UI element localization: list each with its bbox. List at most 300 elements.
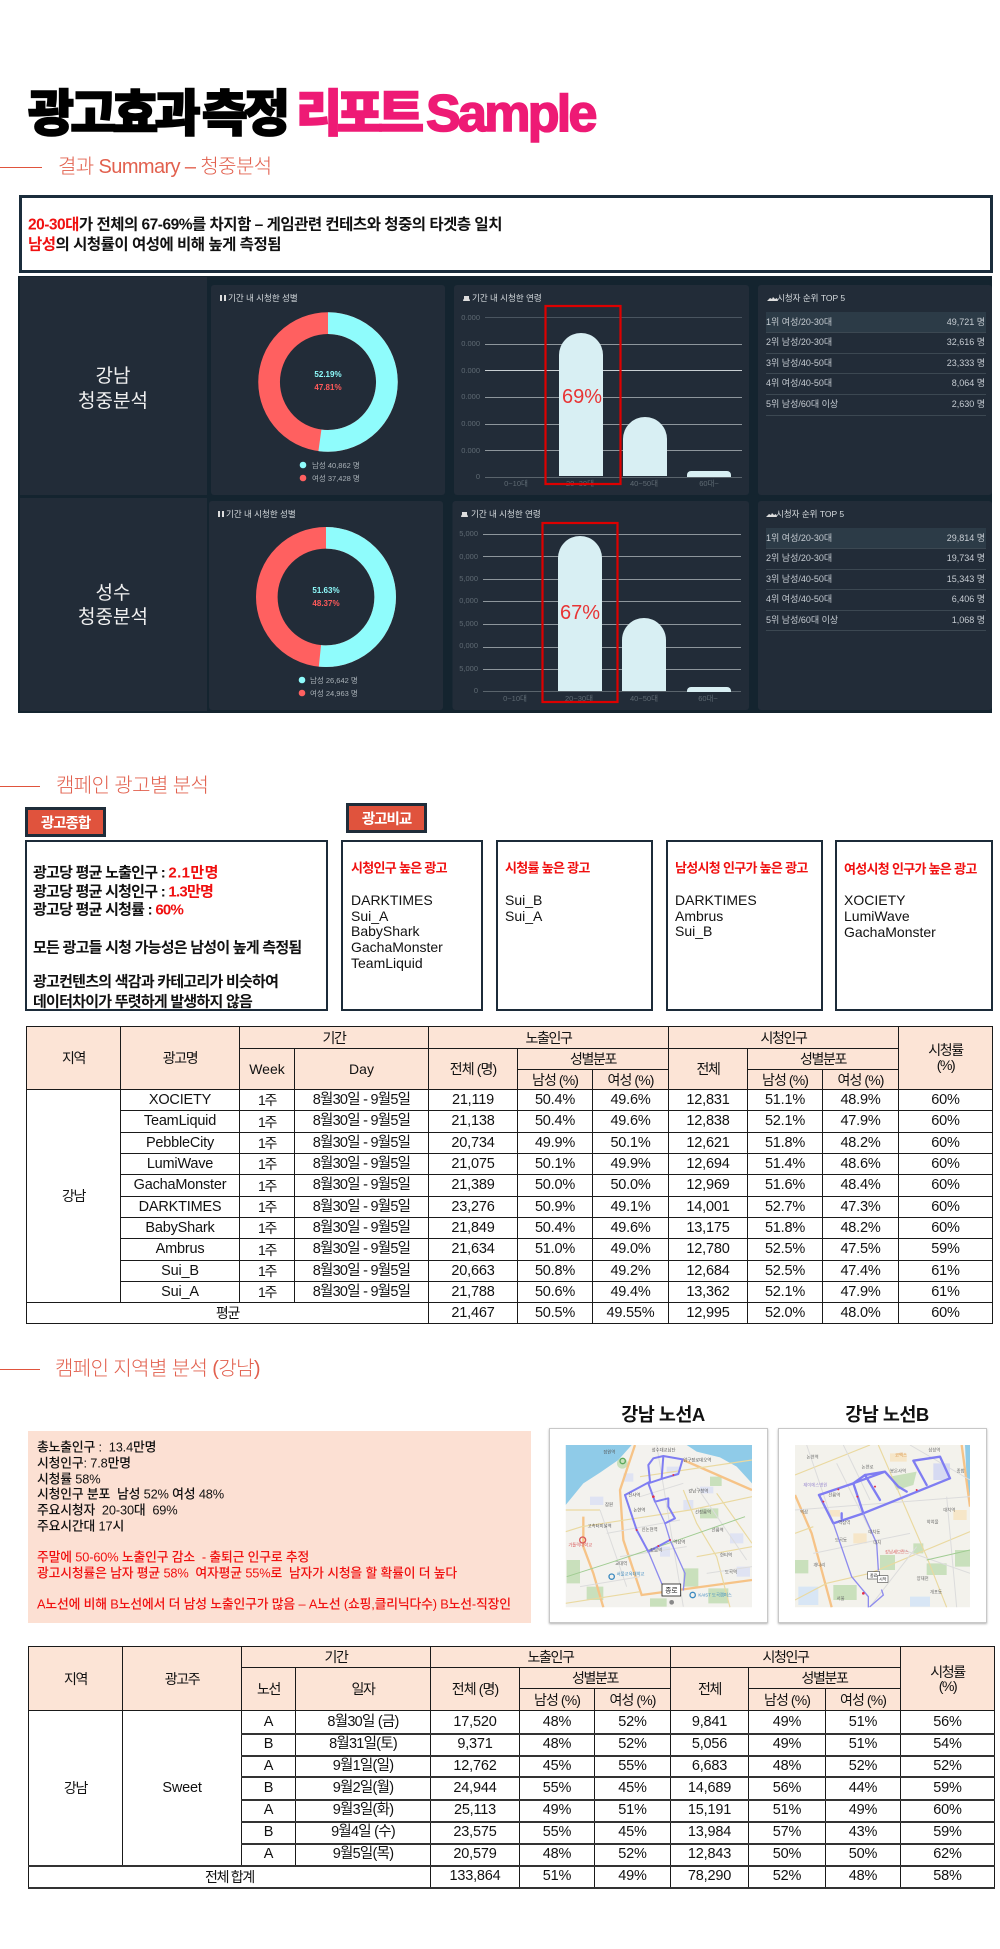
panel: Gangnam top 5: 1위 여성/20-30대 (766, 316, 832, 327)
table: per-region analysis: 49% (849, 1802, 877, 1818)
table: per-ad analysis: 1주 (258, 1284, 276, 1300)
table: per-ad analysis: 50.1% (610, 1135, 651, 1151)
panel: Seongsu gender donut: 남성 26,642 명 (310, 675, 358, 685)
table: per-ad analysis: 광고명 (163, 1050, 197, 1066)
map: route B: 시작 (879, 1576, 887, 1582)
table: per-ad analysis: 48.0% (840, 1305, 881, 1321)
table: per-region analysis: 55% (618, 1758, 647, 1774)
table: per-ad analysis: 8월30일 - 9월5일 (313, 1220, 410, 1236)
table: per-ad analysis (26, 1026, 993, 1324)
table: per-ad analysis: 기간 (323, 1030, 345, 1046)
table: per-region analysis: 12,762 (453, 1758, 497, 1774)
table: per-region analysis: A (264, 1802, 273, 1818)
panel: Seongsu age bar chart: 60대~ (698, 694, 718, 703)
table: per-region analysis: 56% (933, 1714, 962, 1730)
panel: Gangnam label: 청중분석 (78, 390, 148, 412)
panel: region summary: 주말에 50-60% 노출인구 감소 - 출퇴근 인구로 추정 (37, 1550, 309, 1565)
panel: high rate (496, 840, 653, 1011)
table: per-region analysis: Sweet (162, 1780, 202, 1796)
table: per-region analysis: 51% (849, 1714, 877, 1730)
table: per-region analysis: 9월5일(목) (333, 1846, 393, 1862)
table: per-region analysis: 62% (933, 1846, 962, 1862)
table: per-ad analysis: 8월30일 - 9월5일 (313, 1177, 410, 1193)
panel: high female viewers: 여성시청 인구가 높은 광고 (844, 862, 977, 876)
panel: Seongsu label: 청중분석 (78, 606, 148, 628)
map: route B: 논현역 (807, 1453, 819, 1460)
table: per-ad analysis: 52.1% (765, 1113, 805, 1129)
panel: Seongsu gender donut: 48.37% (312, 599, 340, 608)
table: per-region analysis: B (264, 1824, 273, 1840)
table: per-ad analysis: 전체 (명) (450, 1061, 496, 1077)
table: per-region analysis: 51% (543, 1868, 571, 1884)
panel: high rate: Sui_B (505, 892, 542, 908)
table: per-region analysis: 25,113 (454, 1802, 496, 1818)
table: per-ad analysis: 21,849 (451, 1220, 495, 1236)
tag: ad comparison (346, 803, 427, 833)
table: per-ad analysis: 51.8% (765, 1220, 805, 1236)
map: route A: 종로 (665, 1586, 677, 1594)
panel: region summary: 광고시청률은 남자 평균 58% 여자평균 55%로 남자가 시청을 할 확률이 더 높다 (37, 1566, 457, 1581)
panel: Gangnam top 5: 2,630 명 (952, 399, 985, 409)
table: per-region analysis: 6,683 (692, 1758, 727, 1774)
callout: summary text: 20-30대가 전체의 67-69%를 차지함 – 게임관련 컨테츠와 청중의 타겟층 일치 (28, 216, 502, 233)
panel: Seongsu age bar chart: 40~50대 (630, 694, 658, 703)
table: per-ad analysis: XOCIETY (149, 1092, 211, 1108)
table: per-ad analysis: 21,467 (451, 1305, 495, 1321)
heading: route A: 강남 노선A (621, 1404, 705, 1425)
table: per-ad analysis: 49.9% (535, 1135, 575, 1151)
panel: Gangnam top 5: 3위 남성/40-50대 (766, 358, 832, 368)
panel: high viewers: GachaMonster (351, 939, 443, 955)
table: per-region analysis: 52% (933, 1758, 962, 1774)
table: per-ad analysis: 48.9% (840, 1092, 881, 1108)
panel: Gangnam age bar chart: 40~50대 (630, 479, 658, 488)
panel: ad summary: 광고컨텐츠의 색감과 카테고리가 비슷하여 (33, 974, 278, 990)
panel: high rate: Sui_A (505, 908, 542, 924)
table: per-ad analysis: 61% (931, 1263, 960, 1279)
panel: ad summary: 모든 광고들 시청 가능성은 남성이 높게 측정됨 (33, 940, 301, 956)
panel: high male viewers: 남성시청 인구가 높은 광고 (675, 860, 808, 876)
panel: Seongsu top 5: 19,734 명 (947, 553, 985, 563)
table: per-ad analysis: 49.9% (610, 1156, 651, 1172)
map: route B: 대치 (873, 1539, 881, 1546)
table: per-ad analysis: 60% (931, 1220, 960, 1236)
table: per-region analysis: 43% (849, 1824, 877, 1840)
table: per-ad analysis: 52.0% (765, 1305, 805, 1321)
panel: Gangnam top 5: 32,616 명 (947, 337, 985, 347)
table: per-region analysis: 남성 (%) (764, 1692, 810, 1708)
panel: Seongsu age bar chart: 0,000 (459, 596, 478, 605)
table: per-region analysis: 57% (773, 1824, 801, 1840)
table: per-region analysis: 노출인구 (528, 1649, 573, 1665)
map: route A (566, 1445, 752, 1608)
map: route A: 교대역 (615, 1560, 627, 1567)
table: per-region analysis: 17,520 (453, 1714, 497, 1730)
table: per-region analysis: 8월30일 (금) (327, 1714, 399, 1730)
panel: Seongsu gender donut (209, 501, 443, 710)
table: per-region analysis: 50% (849, 1846, 877, 1862)
map: route B: 서울 (837, 1595, 845, 1602)
table: per-region analysis: 48% (773, 1758, 801, 1774)
panel: Gangnam gender donut: 기간 내 시청한 성별 (228, 293, 298, 303)
map: route A: 신사역 (628, 1492, 640, 1499)
table: per-ad analysis: 49.55% (606, 1305, 654, 1321)
panel: Gangnam gender donut: 남성 40,862 명 (312, 460, 360, 470)
table: per-region analysis: 60% (933, 1802, 962, 1818)
table: per-ad analysis: Sui_B (161, 1263, 199, 1279)
table: per-ad analysis: 50.9% (535, 1199, 575, 1215)
panel: high viewers: 시청인구 높은 광고 (351, 860, 447, 876)
panel: Seongsu top 5: 2위 남성/20-30대 (766, 553, 832, 563)
table: per-ad analysis: 48.6% (840, 1156, 881, 1172)
panel: region summary: 주요시청자 20-30대 69% (37, 1503, 178, 1518)
panel: Gangnam age bar chart: 0.000 (461, 339, 480, 348)
table: per-ad analysis: 23,276 (451, 1199, 495, 1215)
panel: Gangnam age bar chart: 0.000 (461, 313, 480, 322)
panel: high male viewers (666, 840, 823, 1011)
table: per-region analysis: 지역 (64, 1670, 87, 1686)
table: per-ad analysis: 21,075 (451, 1156, 495, 1172)
table: per-ad analysis: 51.0% (535, 1241, 575, 1257)
panel: region summary (28, 1431, 531, 1623)
table: per-region analysis: 성별분포 (802, 1670, 847, 1686)
panel: Gangnam gender donut: 52.19% (314, 370, 342, 379)
map: route B: 도곡동 (835, 1538, 847, 1544)
table: per-ad analysis: 13,175 (686, 1220, 730, 1236)
table: per-ad analysis: 12,969 (686, 1177, 730, 1193)
panel: ad summary: 데이터차이가 뚜렷하게 발생하지 않음 (33, 994, 252, 1010)
dashboard: audience analysis (18, 276, 992, 713)
table: per-ad analysis: Ambrus (156, 1241, 204, 1257)
table: per-ad analysis: 52.7% (765, 1199, 805, 1215)
panel: Seongsu age bar chart: 0 (474, 686, 478, 695)
panel: Seongsu age bar chart: 5,000 (459, 664, 478, 673)
table: per-region analysis: 55% (543, 1824, 571, 1840)
panel: Gangnam top 5: 8,064 명 (952, 378, 985, 388)
table: per-ad analysis: 49.6% (610, 1220, 651, 1236)
panel: Seongsu label (20, 498, 207, 711)
table: per-ad analysis: 1주 (258, 1135, 276, 1151)
panel: Gangnam age bar chart: 0 (476, 472, 480, 481)
table: per-ad analysis: 1주 (258, 1092, 276, 1108)
table: per-region analysis: 51% (849, 1736, 877, 1752)
panel: high female viewers: LumiWave (844, 908, 910, 924)
table: per-region analysis: 45% (618, 1780, 647, 1796)
panel: Gangnam age bar chart: 0.000 (461, 366, 480, 375)
table: per-ad analysis: 13,362 (686, 1284, 730, 1300)
map: route A: KAIST 도곡캠퍼스 (698, 1592, 732, 1599)
table: per-ad analysis: 12,684 (686, 1263, 730, 1279)
panel: high female viewers: GachaMonster (844, 924, 936, 940)
panel: Seongsu top 5: 29,814 명 (947, 533, 985, 543)
table: per-ad analysis: 51.1% (765, 1092, 805, 1108)
table: per-region analysis: 5,056 (692, 1736, 727, 1752)
table: per-region analysis: 24,944 (453, 1780, 497, 1796)
map: route A: 강남역 (650, 1547, 662, 1554)
table: per-region analysis: 55% (543, 1780, 571, 1796)
panel: ad summary: 광고당 평균 노출인구 : 2.1만명 (33, 864, 219, 882)
table: per-region analysis: 23,575 (453, 1824, 497, 1840)
table: per-ad analysis: 성별분포 (570, 1051, 616, 1067)
table: per-ad analysis: 남성 (%) (532, 1072, 578, 1088)
table: per-region analysis: 54% (933, 1736, 962, 1752)
table: per-ad analysis: (%) (937, 1057, 954, 1073)
panel: region summary: 시청인구 분포 남성 52% 여성 48% (37, 1487, 224, 1502)
panel: Seongsu top 5: 1,068 명 (952, 615, 985, 625)
panel: Seongsu age bar chart: 0,000 (459, 552, 478, 561)
map: route B (795, 1445, 970, 1608)
table: per-region analysis: 48% (543, 1714, 571, 1730)
map: route A: 가톨릭대학교 (568, 1542, 592, 1549)
panel: region summary: 총노출인구 : 13.4만명 (37, 1440, 156, 1455)
table: per-ad analysis: 60% (931, 1199, 960, 1215)
table: per-ad analysis: 8월30일 - 9월5일 (313, 1135, 410, 1151)
panel: Gangnam age bar chart (454, 285, 749, 495)
table: per-region analysis: 강남 (64, 1780, 87, 1796)
table: per-ad analysis: 1주 (258, 1156, 276, 1172)
panel: high female viewers (835, 840, 993, 1011)
panel: Gangnam label: 강남 (96, 365, 130, 387)
table: per-region analysis: 52% (618, 1846, 647, 1862)
table: per-region analysis: 15,191 (688, 1802, 731, 1818)
callout: summary text: 남성의 시청률이 여성에 비해 높게 측정됨 (28, 236, 281, 253)
map: route A: 한티역 (720, 1552, 732, 1559)
panel: high female viewers: XOCIETY (844, 892, 905, 908)
table: per-ad analysis: 12,831 (686, 1092, 730, 1108)
table: per-ad analysis: 51.6% (765, 1177, 805, 1193)
table: per-region analysis: 51% (773, 1802, 801, 1818)
table: per-ad analysis: 50.1% (535, 1156, 575, 1172)
heading: route B: 강남 노선B (845, 1404, 929, 1425)
table: per-ad analysis: 50.0% (535, 1177, 575, 1193)
panel: region summary: 시청률 58% (37, 1472, 100, 1487)
table: per-region analysis: 78,290 (688, 1868, 731, 1884)
panel: Seongsu top 5 (758, 501, 992, 710)
panel: Gangnam age bar chart: 0.000 (461, 419, 480, 428)
table: per-ad analysis: 50.4% (535, 1113, 575, 1129)
map: route A: 서울교육대학교 (617, 1571, 645, 1578)
panel: Seongsu top 5: 15,343 명 (947, 574, 985, 584)
table: per-ad analysis: 21,119 (452, 1092, 494, 1108)
title: 리포트 (296, 86, 419, 142)
table: per-region analysis: B (264, 1736, 273, 1752)
table: per-ad analysis: 49.0% (610, 1241, 651, 1257)
map: route B: 역삼 (800, 1508, 808, 1515)
panel: Gangnam age bar chart: 0.000 (461, 446, 480, 455)
map: route A: 선정릉역 (695, 1508, 711, 1515)
table: per-ad analysis: 1주 (258, 1199, 276, 1215)
table: per-ad analysis: 60% (931, 1305, 960, 1321)
panel: Gangnam top 5: 49,721 명 (947, 317, 985, 327)
table: per-ad analysis: 60% (931, 1156, 960, 1172)
panel: Seongsu age bar chart: 기간 내 시청한 연령 (471, 509, 541, 519)
table: per-ad analysis: 12,780 (686, 1241, 730, 1257)
panel: ad summary: 광고당 평균 시청률 : 60% (33, 902, 183, 918)
table: per-region analysis: 여성 (%) (609, 1692, 656, 1708)
panel: Seongsu age bar chart: 5,000 (459, 574, 478, 583)
table: per-region analysis: 52% (773, 1868, 801, 1884)
table: per-region analysis: 48% (849, 1868, 877, 1884)
table: per-region analysis: 44% (849, 1780, 877, 1796)
table: per-region analysis: 48% (543, 1736, 571, 1752)
panel: Gangnam top 5 (758, 285, 992, 495)
table: per-ad analysis: 시청률 (928, 1042, 963, 1058)
table: per-region analysis: 9월4일 (수) (331, 1824, 395, 1840)
map: route B: 봉은사역 (890, 1468, 906, 1475)
panel: Seongsu top 5: 시청자 순위 TOP 5 (776, 509, 844, 519)
map: route B: 대치동 (868, 1528, 880, 1535)
panel: Gangnam age bar chart: 60대~ (699, 479, 719, 488)
table: per-ad analysis: 20,734 (451, 1135, 495, 1151)
table: per-region analysis: (%) (939, 1678, 956, 1694)
table: per-region analysis: 49% (773, 1736, 801, 1752)
table: per-ad analysis: 8월30일 - 9월5일 (313, 1092, 410, 1108)
table: per-region analysis: 52% (618, 1736, 647, 1752)
table: per-ad analysis: 여성 (%) (837, 1072, 884, 1088)
table: per-region analysis: 50% (773, 1846, 801, 1862)
table: per-ad analysis: LumiWave (147, 1156, 213, 1172)
table: per-region analysis: 시청인구 (763, 1649, 808, 1665)
map: route B: 코엑스 (895, 1452, 907, 1459)
panel: Seongsu age bar chart: 0~10대 (503, 694, 527, 703)
panel: Gangnam top 5: 5위 남성/60대 이상 (766, 399, 838, 409)
map: route A: 역삼역 (673, 1538, 685, 1545)
panel: high viewers: TeamLiquid (351, 955, 423, 971)
table: per-ad analysis: 50.4% (535, 1220, 575, 1236)
map: route B: 학여울 (927, 1518, 939, 1525)
table: per-region analysis: A (264, 1714, 273, 1730)
table: per-ad analysis: 여성 (%) (607, 1072, 654, 1088)
table: per-region analysis: 51% (618, 1802, 647, 1818)
panel: high rate: 시청률 높은 광고 (505, 860, 590, 876)
map: route B: 개포동 (930, 1588, 942, 1595)
table: per-ad analysis: 49.6% (610, 1092, 651, 1108)
map: route B: 선릉역 (828, 1492, 840, 1499)
panel: Gangnam top 5: 4위 여성/40-50대 (766, 377, 832, 388)
table: per-ad analysis: 21,389 (451, 1177, 495, 1193)
panel: Seongsu top 5: 4위 여성/40-50대 (766, 593, 832, 604)
table: per-ad analysis: 50.6% (535, 1284, 575, 1300)
panel: Gangnam top 5: 23,333 명 (947, 358, 985, 368)
panel: Seongsu age bar chart: 0,000 (459, 641, 478, 650)
map: route A: 잠원 (605, 1501, 613, 1507)
table: per-ad analysis: 51.4% (765, 1156, 805, 1172)
table: per-ad analysis: 1주 (258, 1220, 276, 1236)
panel: Seongsu top 5: 5위 남성/60대 이상 (766, 615, 838, 625)
panel: Seongsu gender donut: 51.63% (312, 586, 340, 595)
table: per-ad analysis: Sui_A (161, 1284, 199, 1300)
table: per-ad analysis: 12,621 (686, 1135, 730, 1151)
table: per-region analysis: 133,864 (449, 1868, 500, 1884)
table: per-ad analysis: Day (349, 1061, 374, 1077)
panel: high viewers: Sui_A (351, 908, 388, 924)
map: route B: 종합 (957, 1468, 965, 1474)
table: per-region analysis: 52% (618, 1714, 647, 1730)
table: per-region analysis: 9,841 (692, 1714, 727, 1730)
panel: Seongsu age bar chart: 5,000 (459, 619, 478, 628)
table: per-ad analysis: 8월30일 - 9월5일 (313, 1113, 410, 1129)
table: per-ad analysis: 전체 (697, 1061, 719, 1077)
table: per-ad analysis: PebbleCity (146, 1135, 214, 1151)
map: route B: 개나리 (813, 1562, 825, 1569)
table: per-ad analysis: 49.4% (610, 1284, 651, 1300)
table: per-ad analysis: 성별분포 (800, 1051, 846, 1067)
table: per-ad analysis: 12,838 (686, 1113, 730, 1129)
map: route A: 선릉역 (712, 1527, 724, 1534)
table: per-ad analysis: BabyShark (145, 1220, 215, 1236)
table: per-ad analysis: 59% (931, 1241, 960, 1257)
panel: Seongsu gender donut: 여성 24,963 명 (310, 688, 358, 698)
map: route B: 양재천 (917, 1575, 929, 1582)
table: per-region analysis: 45% (618, 1824, 647, 1840)
table: per-ad analysis: 1주 (258, 1263, 276, 1279)
table: per-region analysis: 48% (543, 1846, 571, 1862)
table: per-region analysis: 14,689 (688, 1780, 731, 1796)
title: Sample (426, 85, 595, 143)
table: per-region analysis: B (264, 1780, 273, 1796)
table: per-region analysis: 기간 (325, 1649, 347, 1665)
table: per-region analysis: 노선 (257, 1681, 280, 1697)
table: per-region analysis: A (264, 1846, 273, 1862)
table: per-ad analysis: 49.2% (610, 1263, 651, 1279)
panel: Gangnam age bar chart: 0.000 (461, 392, 480, 401)
table: per-ad analysis: 1주 (258, 1114, 276, 1130)
panel: Seongsu top 5: 1위 여성/20-30대 (766, 532, 832, 543)
table: per-ad analysis: 1주 (258, 1242, 276, 1258)
table: per-ad analysis: 50.4% (535, 1092, 575, 1108)
panel: high viewers (341, 840, 483, 1011)
panel: Gangnam age bar chart: 0~10대 (504, 479, 528, 488)
table: per-region analysis: A (264, 1758, 273, 1774)
table: per-ad analysis: 61% (931, 1284, 960, 1300)
table: per-ad analysis: 21,138 (451, 1113, 495, 1129)
map: route A: 도곡역 (725, 1568, 737, 1575)
table: per-region analysis: 59% (933, 1780, 962, 1796)
table: per-region analysis: 59% (933, 1824, 962, 1840)
table: per-ad analysis: 52.1% (765, 1284, 805, 1300)
table: per-ad analysis: 60% (931, 1092, 960, 1108)
table: per-ad analysis: 8월30일 - 9월5일 (313, 1263, 410, 1279)
panel: Gangnam gender donut: 여성 37,428 명 (312, 473, 360, 483)
title: 광고효과 측정 (28, 86, 286, 142)
card: route A map (549, 1428, 768, 1623)
table: per-ad analysis: 52.5% (765, 1263, 805, 1279)
map: route B: 대치역 (943, 1507, 955, 1514)
panel: Seongsu top 5: 6,406 명 (952, 594, 985, 604)
table: per-region analysis: 9월2일(월) (333, 1780, 393, 1796)
table: per-ad analysis: 60% (931, 1113, 960, 1129)
map: route A: 압구정로데오역 (683, 1457, 711, 1464)
table: per-region analysis: 전체 합계 (205, 1868, 254, 1884)
table: per-region analysis: 9월1일(일) (333, 1758, 393, 1774)
map: route B: 역삼역 (838, 1519, 850, 1526)
table: per-region analysis: 49% (618, 1868, 647, 1884)
table: per-ad analysis: 52.5% (765, 1241, 805, 1257)
map: route A: 잠원역 (603, 1448, 615, 1455)
table: per-ad analysis: 50.5% (535, 1305, 575, 1321)
panel: region summary: 주요시간대 17시 (37, 1519, 124, 1534)
table: per-ad analysis: 51.8% (765, 1135, 805, 1151)
map: route A: 성수대교남단 (652, 1447, 676, 1454)
panel: region summary: A노선에 비해 B노선에서 더 남성 노출인구가 많음 – A노선 (쇼핑,클리닉다수) B노선-직장인 (37, 1597, 511, 1612)
panel: Gangnam age bar chart: 20~30대 (566, 479, 594, 488)
table: per-ad analysis: 20,663 (451, 1263, 495, 1279)
panel: Gangnam gender donut (211, 285, 445, 495)
panel: Seongsu age bar chart (452, 501, 749, 710)
heading: summary: 결과 Summary – 청중분석 (58, 156, 272, 178)
table: per-ad analysis: 47.4% (840, 1263, 881, 1279)
table: per-region analysis: 12,843 (688, 1846, 731, 1862)
